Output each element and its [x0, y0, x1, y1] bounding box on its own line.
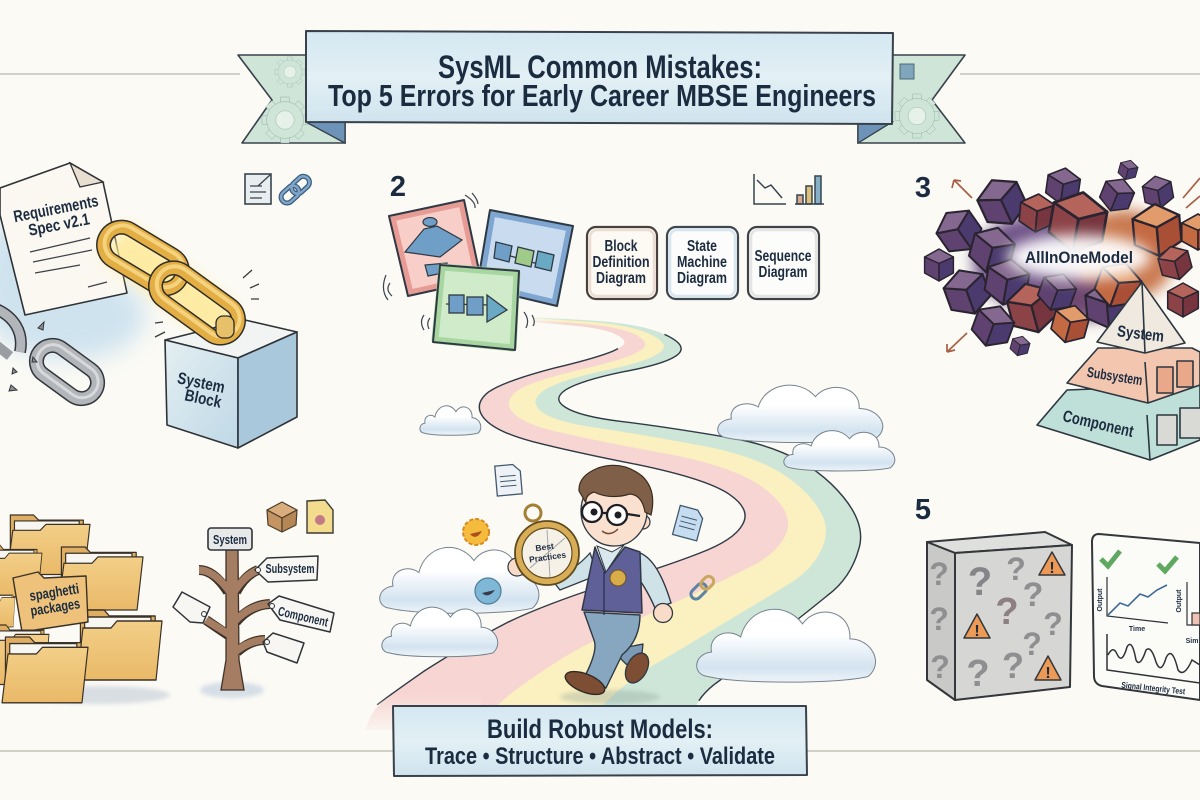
AllInOneModel label	[1007, 235, 1151, 279]
tag: component: Component	[277, 603, 330, 630]
pyramid: subsystem	[1067, 348, 1200, 403]
pyramid: system: System	[1116, 323, 1165, 346]
title text: Top 5 Errors for Early Career MBSE Engineers	[328, 78, 876, 113]
signal chart	[1107, 634, 1200, 683]
number 2: 2	[390, 171, 406, 203]
card: red	[389, 200, 481, 296]
diagram labels	[587, 227, 819, 299]
sign: system: System	[213, 532, 247, 547]
exploding cubes	[925, 158, 1200, 358]
number 5: 5	[915, 494, 931, 526]
sign: system	[208, 528, 252, 550]
road yellow band	[365, 318, 826, 730]
question marks: ?	[995, 591, 1019, 633]
pyramid: component: Component	[1061, 407, 1136, 441]
tree hierarchy	[173, 528, 334, 698]
icon: note and chain	[245, 174, 312, 206]
folder: spaghetti packages: packages	[29, 596, 81, 620]
folder: spaghetti packages	[13, 572, 88, 632]
broken gray chain	[0, 308, 104, 405]
label: state machine diagram: State	[687, 238, 717, 255]
black box of unknowns	[927, 532, 1072, 700]
folder: spaghetti packages: spaghetti	[28, 581, 80, 605]
right arm	[633, 553, 671, 608]
pocket compass: Best	[535, 541, 555, 553]
ribbon tail left	[238, 55, 345, 143]
icon: trend charts	[754, 174, 824, 204]
character with compass	[463, 464, 716, 704]
tag: blank left	[173, 592, 210, 623]
question marks: ?	[1006, 551, 1026, 587]
question marks: ?	[966, 653, 990, 695]
icon: package box	[267, 502, 297, 532]
question marks: ?	[930, 649, 950, 685]
cards	[383, 193, 573, 350]
folder pile	[0, 515, 162, 703]
pocket compass: Practices	[529, 549, 567, 565]
panel: mistake 2 diagrams	[383, 171, 824, 350]
front shoe	[562, 667, 608, 699]
pyramid: system	[1097, 282, 1185, 353]
banner text	[425, 714, 775, 770]
AllInOneModel label: AllInOneModel	[1025, 249, 1133, 267]
right hand	[654, 604, 672, 622]
question marks: ?	[1022, 626, 1042, 662]
pyramid	[1037, 282, 1200, 460]
cloud: right back	[718, 385, 883, 443]
label: sequence diagram	[748, 227, 819, 299]
cloud: left upper	[380, 547, 539, 613]
road bottom fade	[350, 695, 481, 737]
left arm	[552, 553, 598, 590]
vest	[582, 545, 642, 615]
tag: component	[268, 596, 334, 632]
pyramid: subsystem: Subsystem	[1086, 365, 1144, 389]
banner text: Build Robust Models:	[487, 714, 713, 744]
test results board: Sim	[1186, 638, 1198, 645]
panel: mistake 1 traceability	[0, 163, 312, 448]
cloud: left lower	[382, 607, 498, 657]
pyramid: component	[1037, 385, 1200, 460]
requirements document: Requirements	[12, 192, 100, 226]
emoji orange	[463, 519, 489, 545]
warning triangles: !	[1045, 665, 1051, 682]
clouds behind	[380, 385, 895, 682]
trousers and front leg	[584, 612, 640, 688]
label: block definition diagram: Block	[604, 238, 638, 255]
tag: blank lower	[263, 633, 304, 663]
warning triangles: !	[974, 623, 980, 640]
tag: subsystem	[255, 556, 318, 582]
question marks: ?	[929, 556, 949, 592]
motion marks	[383, 193, 534, 330]
road start fade	[517, 308, 567, 330]
title text: SysML Common Mistakes:	[438, 49, 762, 85]
number 3: 3	[915, 172, 931, 204]
question marks: ?	[1023, 576, 1043, 614]
question marks: ?	[968, 560, 992, 604]
cloud: right front	[784, 431, 895, 471]
road pink band	[365, 320, 788, 730]
road edges	[377, 334, 861, 705]
glasses	[582, 502, 640, 525]
floating doc right	[673, 505, 704, 541]
panel: mistake 4 package structure	[0, 500, 334, 704]
label: block definition diagram: Definition	[592, 254, 650, 271]
question marks: ?	[1043, 606, 1063, 642]
system block: Block	[183, 386, 224, 412]
tag: subsystem: Subsystem	[266, 561, 314, 576]
test results board: Time	[1129, 626, 1145, 633]
label: state machine diagram	[667, 227, 738, 299]
question marks: ?	[929, 601, 949, 637]
golden chain glow	[115, 240, 225, 325]
panel: mistake 5 validation	[915, 494, 1200, 700]
icon: file	[307, 500, 333, 533]
warning triangles: !	[1049, 560, 1055, 577]
shadow under feet	[560, 690, 660, 704]
title banner	[238, 31, 965, 143]
requirements document	[0, 163, 127, 315]
floating doc left	[495, 464, 522, 496]
test results board: Signal Integrity Test	[1121, 680, 1186, 696]
folder shadow	[30, 686, 170, 704]
requirements document: Spec v2.1	[27, 210, 91, 240]
test results board	[1092, 534, 1200, 700]
hair	[579, 465, 653, 515]
head	[579, 465, 653, 546]
warning triangles	[964, 552, 1065, 682]
link icon	[689, 574, 716, 601]
rainbow road	[350, 308, 861, 737]
label: block definition diagram: Diagram	[596, 270, 646, 287]
system block: System	[176, 369, 226, 397]
sparkles	[155, 270, 259, 337]
label: state machine diagram: Machine	[677, 254, 727, 271]
ribbon tail right	[858, 55, 965, 143]
burst arrows	[947, 178, 1200, 352]
title text	[328, 49, 876, 113]
question marks	[929, 551, 1063, 695]
blue wash	[0, 220, 145, 360]
test results board: Output	[1176, 589, 1183, 612]
banner panel	[306, 31, 893, 124]
label: state machine diagram: Diagram	[677, 270, 727, 287]
emoji blue	[475, 578, 501, 604]
system block	[165, 320, 297, 448]
card: blue	[477, 210, 573, 306]
cloud: right bottom	[697, 609, 876, 682]
bottom banner	[393, 706, 807, 776]
back leg	[612, 644, 653, 687]
banner text: Trace • Structure • Abstract • Validate	[425, 743, 775, 770]
label: block definition diagram	[587, 227, 657, 299]
road green band	[365, 317, 861, 730]
label: sequence diagram: Diagram	[758, 264, 808, 281]
banner panel	[393, 706, 807, 776]
question marks: ?	[1002, 645, 1024, 686]
label: sequence diagram: Sequence	[754, 248, 812, 265]
pocket compass	[508, 505, 579, 585]
check marks	[1101, 551, 1177, 571]
line chart	[1107, 577, 1200, 625]
card: green	[433, 265, 519, 350]
test results board: Output	[1097, 588, 1104, 611]
golden chain	[97, 219, 247, 345]
cloud: small left	[420, 406, 481, 435]
panel: mistake 3 abstraction	[915, 158, 1200, 460]
